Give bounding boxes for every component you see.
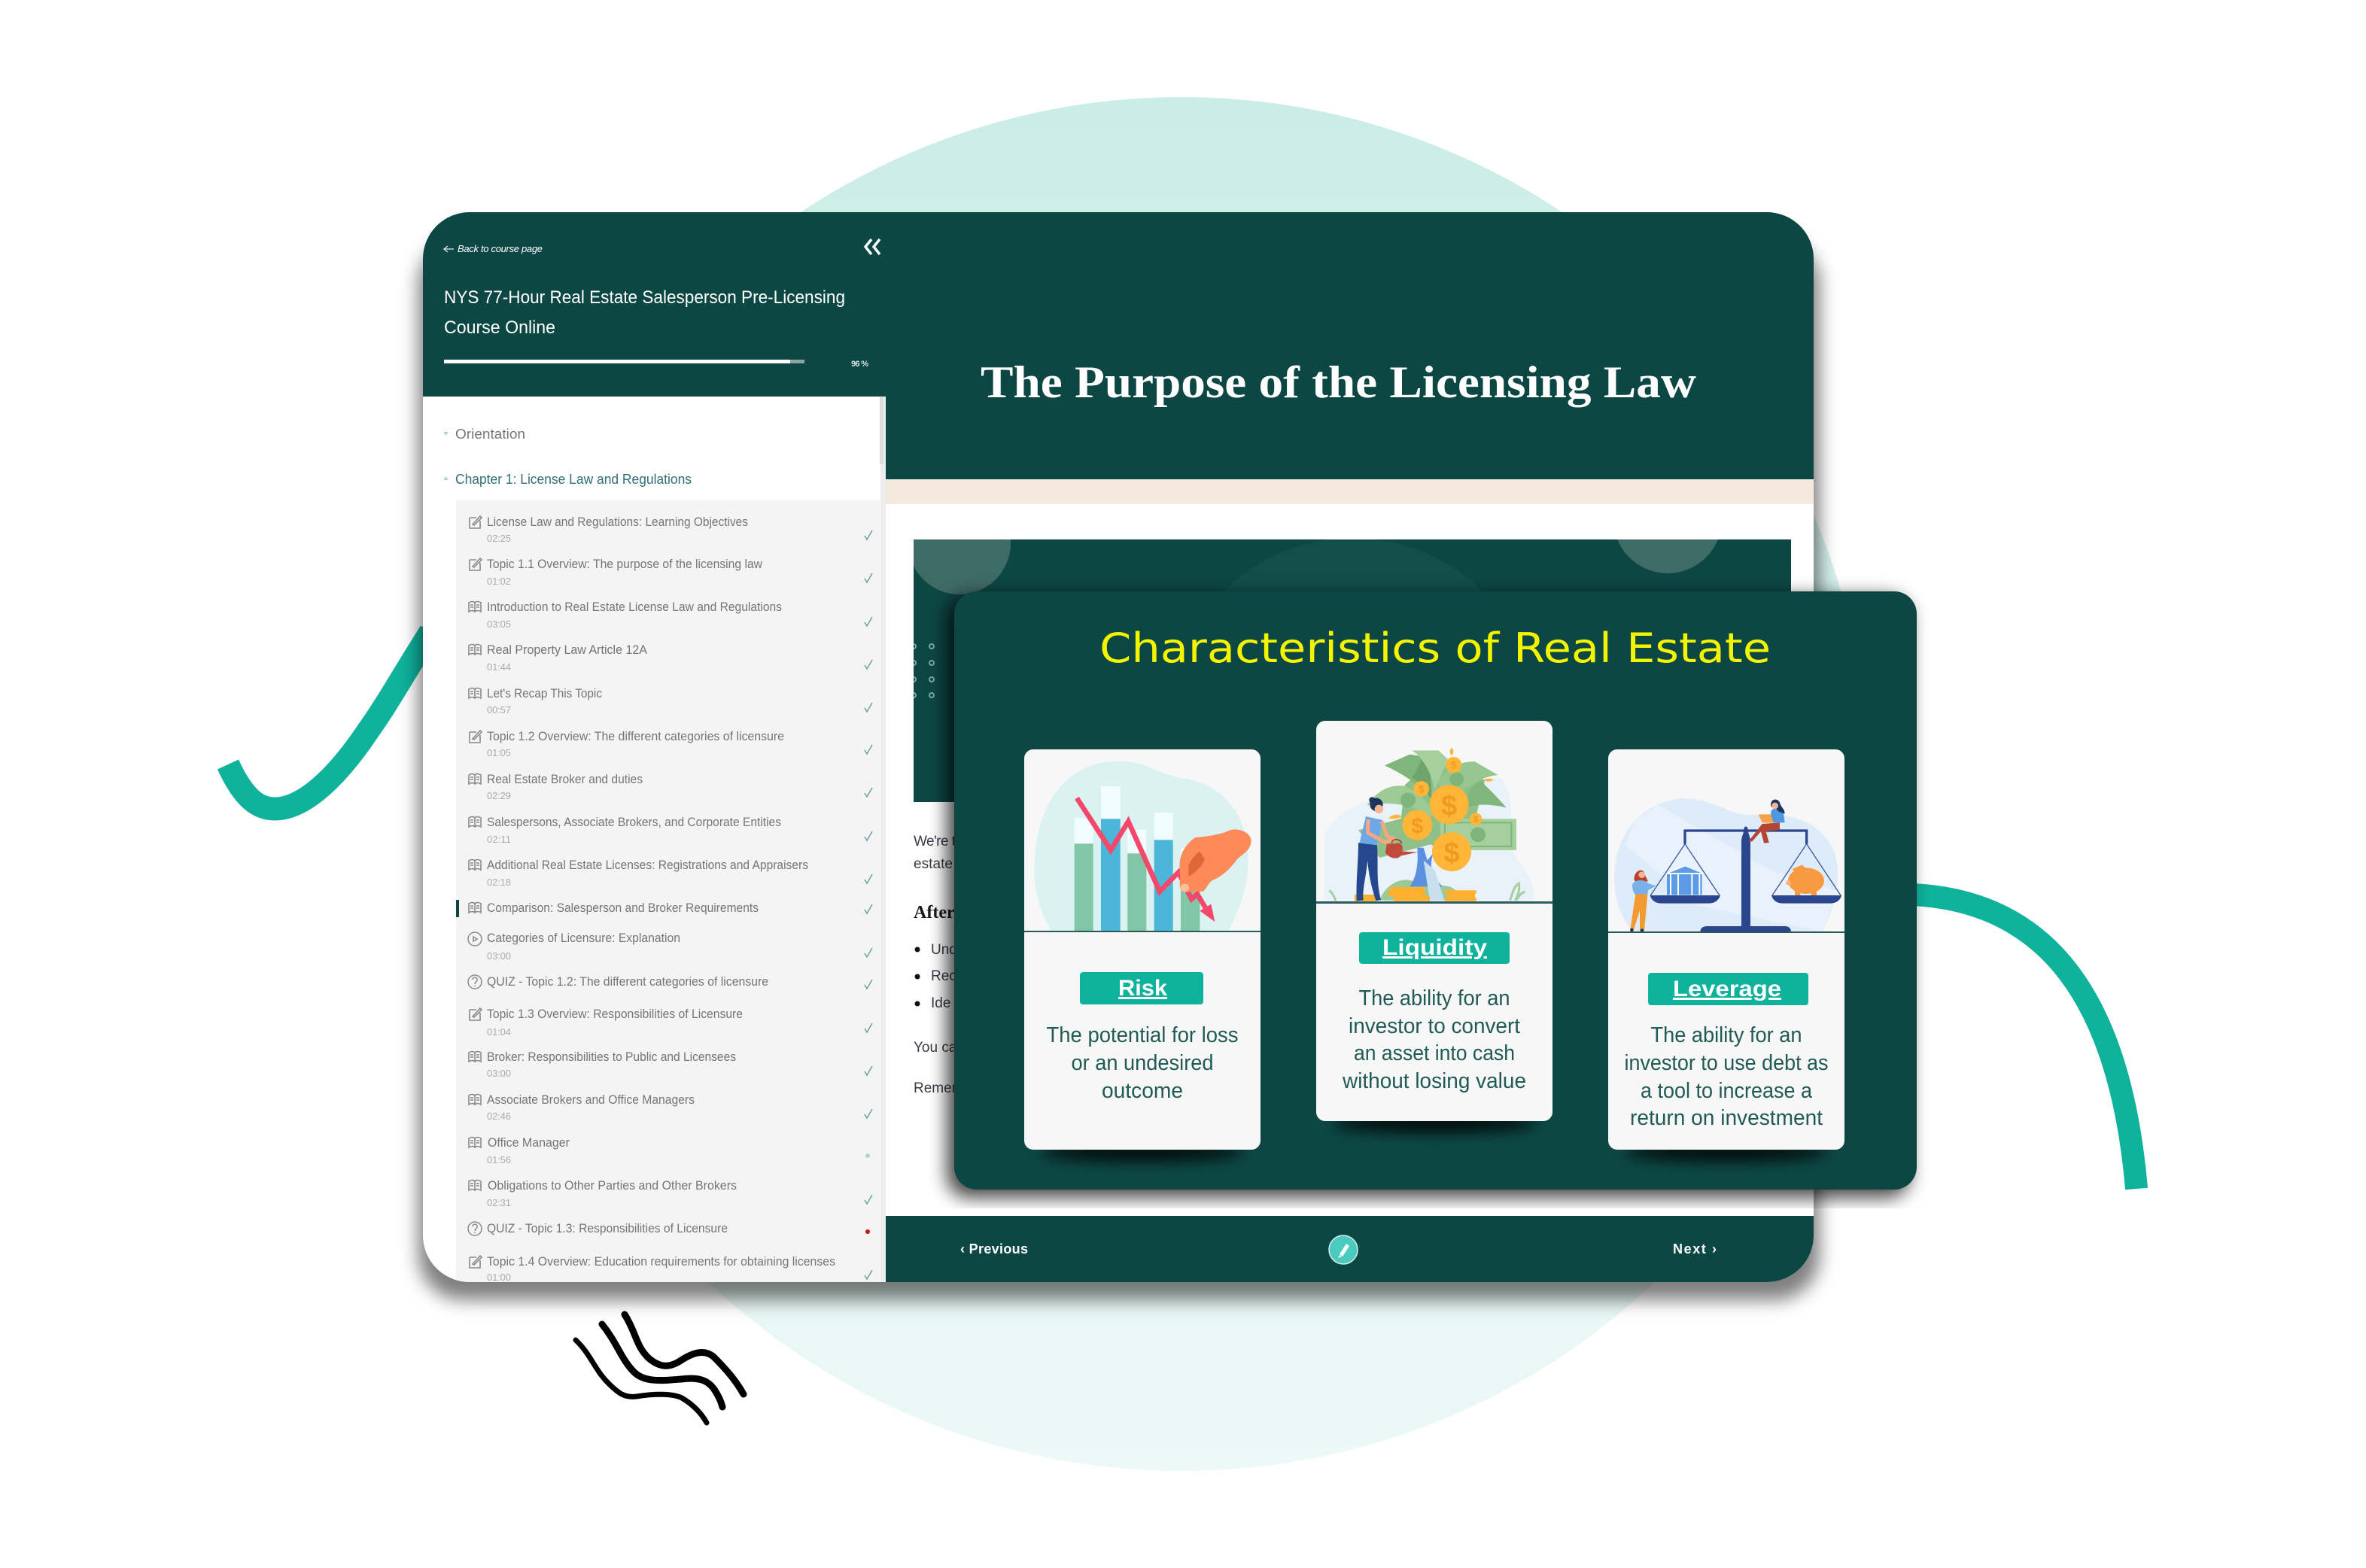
- lesson row: 00:57: [487, 704, 511, 716]
- lesson row: 01:56: [487, 1154, 511, 1165]
- liquidity description: without losing value: [1342, 1069, 1526, 1093]
- lesson body text fragments: Remen: [914, 1080, 959, 1096]
- lesson row: [469, 1135, 870, 1165]
- lesson body text fragments: Ide: [931, 995, 950, 1011]
- modal heading: Characteristics of Real Estate: [1099, 624, 1771, 672]
- card: leverage: [1608, 749, 1844, 1162]
- label: leverage: [1648, 973, 1808, 1005]
- card: risk: [1024, 749, 1261, 1162]
- progress bar: [444, 360, 804, 363]
- lesson row: Broker: Responsibilities to Public and Licensees: [487, 1050, 736, 1064]
- icon: money tree with woman watering: $: [1441, 789, 1457, 822]
- lesson row: License Law and Regulations: Learning Objectives: [487, 515, 748, 529]
- lesson row: 02:46: [487, 1111, 511, 1122]
- lesson row: [470, 1007, 872, 1038]
- lesson row: 01:05: [487, 747, 511, 758]
- lesson row: 02:18: [487, 877, 511, 888]
- orientation section: Orientation: [455, 427, 525, 442]
- lesson row: Topic 1.4 Overview: Education requirements for obtaining licenses: [487, 1254, 835, 1269]
- label: leverage: Leverage: [1673, 977, 1781, 1001]
- label: liquidity: [1359, 932, 1510, 964]
- collapse chevrons: [865, 239, 880, 254]
- sidebar column edge: [880, 397, 886, 1282]
- label: liquidity: Liquidity: [1382, 935, 1487, 960]
- lesson row: Introduction to Real Estate License Law and Regulations: [487, 600, 782, 614]
- main panel drop shadow: [418, 239, 1820, 1300]
- risk description: [1046, 1023, 1239, 1103]
- lesson row: [469, 1050, 872, 1079]
- lesson row: 02:11: [487, 834, 511, 845]
- liquidity description: an asset into cash: [1354, 1041, 1515, 1065]
- lesson row: 02:31: [487, 1197, 511, 1208]
- lesson row: [470, 515, 872, 544]
- lesson row: Obligations to Other Parties and Other Brokers: [488, 1178, 737, 1193]
- lesson row: Salespersons, Associate Brokers, and Corporate Entities: [487, 815, 781, 829]
- lesson row: [469, 600, 872, 630]
- icon: money tree with woman watering: $: [1411, 814, 1423, 838]
- pencil button: [1329, 1235, 1358, 1264]
- modal drop shadow: [947, 596, 1910, 1198]
- risk description: or an undesired: [1072, 1051, 1213, 1075]
- lesson row: [468, 1221, 870, 1235]
- lesson row: [469, 772, 872, 801]
- lesson row: 01:44: [487, 661, 511, 673]
- right teal arc swoosh: [1911, 895, 2136, 1189]
- lesson row: Real Property Law Article 12A: [487, 643, 648, 657]
- lesson row: 03:00: [487, 1068, 511, 1079]
- bottom navigation bar: [886, 1216, 1814, 1282]
- leverage description: a tool to increase a: [1641, 1079, 1813, 1103]
- lesson row: Office Manager: [488, 1135, 570, 1150]
- lesson row: Topic 1.3 Overview: Responsibilities of Licensure: [487, 1007, 743, 1021]
- card shadow: [1625, 1142, 1828, 1162]
- divider line: [1024, 931, 1261, 932]
- lesson row: 01:04: [487, 1026, 511, 1038]
- lesson body text fragments: You ca: [914, 1040, 957, 1056]
- card: liquidity: [1316, 721, 1552, 1133]
- dark lesson image: [914, 539, 1791, 802]
- course title: [445, 290, 844, 333]
- lesson row: [469, 686, 872, 716]
- lesson row: 03:00: [487, 950, 511, 962]
- leverage description: investor to use debt as: [1624, 1051, 1829, 1075]
- lesson row: [470, 729, 872, 758]
- lesson row: [469, 858, 872, 888]
- course player panel: [423, 212, 1814, 1283]
- current lesson marker: [456, 900, 459, 917]
- lesson row: 01:00: [487, 1272, 511, 1283]
- risk description: The potential for loss: [1046, 1023, 1239, 1047]
- label: risk: Risk: [1118, 976, 1167, 1001]
- lesson body text fragments: Rec: [931, 968, 956, 984]
- previous button: ‹ Previous: [960, 1241, 1028, 1257]
- lesson row: QUIZ - Topic 1.3: Responsibilities of Licensure: [487, 1221, 728, 1235]
- lesson row: Let's Recap This Topic: [487, 686, 602, 700]
- lesson title banner: [886, 212, 1814, 479]
- lesson row: Topic 1.1 Overview: The purpose of the licensing law: [487, 557, 763, 571]
- background circle: [494, 97, 1869, 1471]
- lesson row: Associate Brokers and Office Managers: [487, 1092, 695, 1107]
- leverage description: The ability for an: [1651, 1023, 1802, 1047]
- icon: money tree with woman watering: $: [1451, 759, 1457, 771]
- back arrow: [444, 246, 454, 252]
- lesson body text fragments: Und: [931, 942, 957, 958]
- next button: Next ›: [1673, 1241, 1717, 1257]
- leverage description: [1624, 1023, 1829, 1130]
- sidebar header: [423, 212, 886, 397]
- lesson row: 02:29: [487, 790, 511, 801]
- lesson list: [456, 500, 880, 1283]
- liquidity description: investor to convert: [1349, 1014, 1520, 1038]
- lesson row: 01:02: [487, 576, 511, 587]
- icon: money tree with woman watering: $: [1419, 782, 1425, 795]
- main content column: [886, 212, 1814, 1282]
- lesson row: [468, 931, 872, 962]
- lesson row: Real Estate Broker and duties: [487, 772, 643, 786]
- scrollbar thumb: [880, 397, 883, 464]
- lesson row: Topic 1.2 Overview: The different categories of licensure: [487, 729, 784, 743]
- lesson body text fragments: After: [914, 903, 955, 922]
- lesson body text fragments: We're t: [914, 834, 956, 849]
- risk description: outcome: [1102, 1079, 1183, 1103]
- lesson row: [469, 1092, 872, 1122]
- icon: money tree with woman watering: [1324, 747, 1534, 901]
- characteristics modal: [954, 591, 1917, 1190]
- left teal check swoosh: [228, 632, 430, 809]
- liquidity description: [1342, 986, 1526, 1093]
- progress percent: 96 %: [851, 360, 868, 369]
- icon: money tree with woman watering: $: [1443, 837, 1460, 869]
- chapter heading: Chapter 1: License Law and Regulations: [455, 472, 692, 487]
- course title: Course Online: [444, 318, 555, 338]
- lesson row: [469, 643, 872, 673]
- beige divider strip: [886, 479, 1814, 504]
- back link: Back to course page: [458, 243, 543, 254]
- lesson row: 02:25: [487, 533, 511, 544]
- leverage description: return on investment: [1630, 1106, 1823, 1130]
- black wavy squiggle: [576, 1314, 744, 1423]
- label: risk: [1080, 972, 1203, 1004]
- lesson row: QUIZ - Topic 1.2: The different categories of licensure: [487, 974, 768, 989]
- course title: NYS 77-Hour Real Estate Salesperson Pre-Licensing: [444, 287, 845, 308]
- lesson title: The Purpose of the Licensing Law: [981, 357, 1697, 407]
- lesson body text fragments: [914, 835, 954, 1092]
- lesson row: [470, 557, 872, 587]
- icon: falling bar chart with hand: [1034, 761, 1251, 933]
- lesson row: [469, 1178, 872, 1208]
- icon: balance scale with bank and piggy bank: [1614, 798, 1841, 932]
- lesson row: Categories of Licensure: Explanation: [487, 931, 680, 945]
- icon: money tree with woman watering: $: [1473, 816, 1479, 825]
- sidebar: [423, 212, 886, 1283]
- divider line: [1608, 931, 1844, 933]
- lesson row: Additional Real Estate Licenses: Registrations and Appraisers: [487, 858, 808, 872]
- liquidity description: The ability for an: [1359, 986, 1510, 1010]
- lesson row: [470, 1254, 872, 1283]
- lesson body text fragments: estate: [914, 856, 953, 872]
- card shadow: [1041, 1142, 1244, 1162]
- card shadow: [1333, 1114, 1536, 1133]
- lesson row: [469, 815, 872, 845]
- lesson row: 03:05: [487, 618, 511, 630]
- lesson row: Comparison: Salesperson and Broker Requirements: [487, 901, 759, 915]
- divider line: [1316, 901, 1552, 904]
